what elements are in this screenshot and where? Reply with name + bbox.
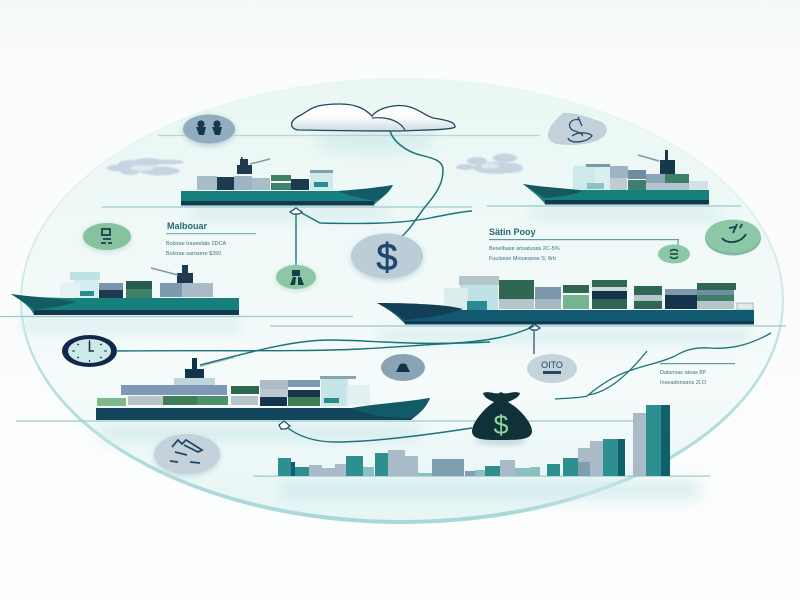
text block: Satin Pay: Beselbase arisatusas 2C-5% [489,246,560,252]
ship 3 mid left [11,265,239,315]
horizon lines [0,136,786,421]
text block: chart note: Datsnsas ateas 8P [660,370,706,376]
icon: cargo badge: OITO [541,360,563,370]
icon: money bag: $ [493,410,509,440]
ship 4 large mid right [377,276,754,324]
icon: dollar swirl badge [548,113,607,145]
cloud top [292,104,455,131]
text block: Satin Pay: Sätin Pooy [489,227,536,237]
connector: cloud to dollar [390,131,443,238]
icon: green person badge [276,265,316,290]
text block: Satin Pay: Fuulsese Mioueaose S; 8rb [489,256,556,262]
icon: clock [62,335,117,367]
icon: dollar coin [351,234,423,281]
icon: people badge [183,114,235,146]
decorative cloud left [107,158,184,176]
text block: Melbourne: Malbouar [167,221,208,231]
icon: money bag [472,392,532,445]
icon: handshake badge [154,434,220,476]
text block: Satin Pay [489,227,679,262]
bar chart [253,405,710,477]
panel: circular disc [20,78,784,524]
text block: chart note: Inseadnnsans 2LO [660,380,707,386]
ship 2 top right [523,150,709,204]
line chart and labels right [555,333,771,399]
text block: Melbourne [166,221,256,257]
connector: arrow up to ship 1 and line to ship 4 [290,208,472,266]
text block: chart note [660,363,735,386]
ship 1 top left [181,157,393,206]
water shadows [20,126,750,500]
text block: Melbourne: Bolsrae traseetals 2DCA [166,241,227,247]
icon: green badge right [705,220,761,256]
icon: green badge left [83,223,131,252]
icon: cargo badge [527,354,577,383]
icon: ship badge [381,354,425,381]
connector: clock to ship 4 [116,324,540,365]
text block: Melbourne: Bolsrae sarosere $350 [166,251,221,257]
connector: ship 5 to money bag [279,421,472,442]
decorative cloud right [456,154,523,174]
icon: small green badge [658,244,690,264]
icon: dollar coin: $ [376,237,398,279]
ship 5 lower left [96,357,430,420]
